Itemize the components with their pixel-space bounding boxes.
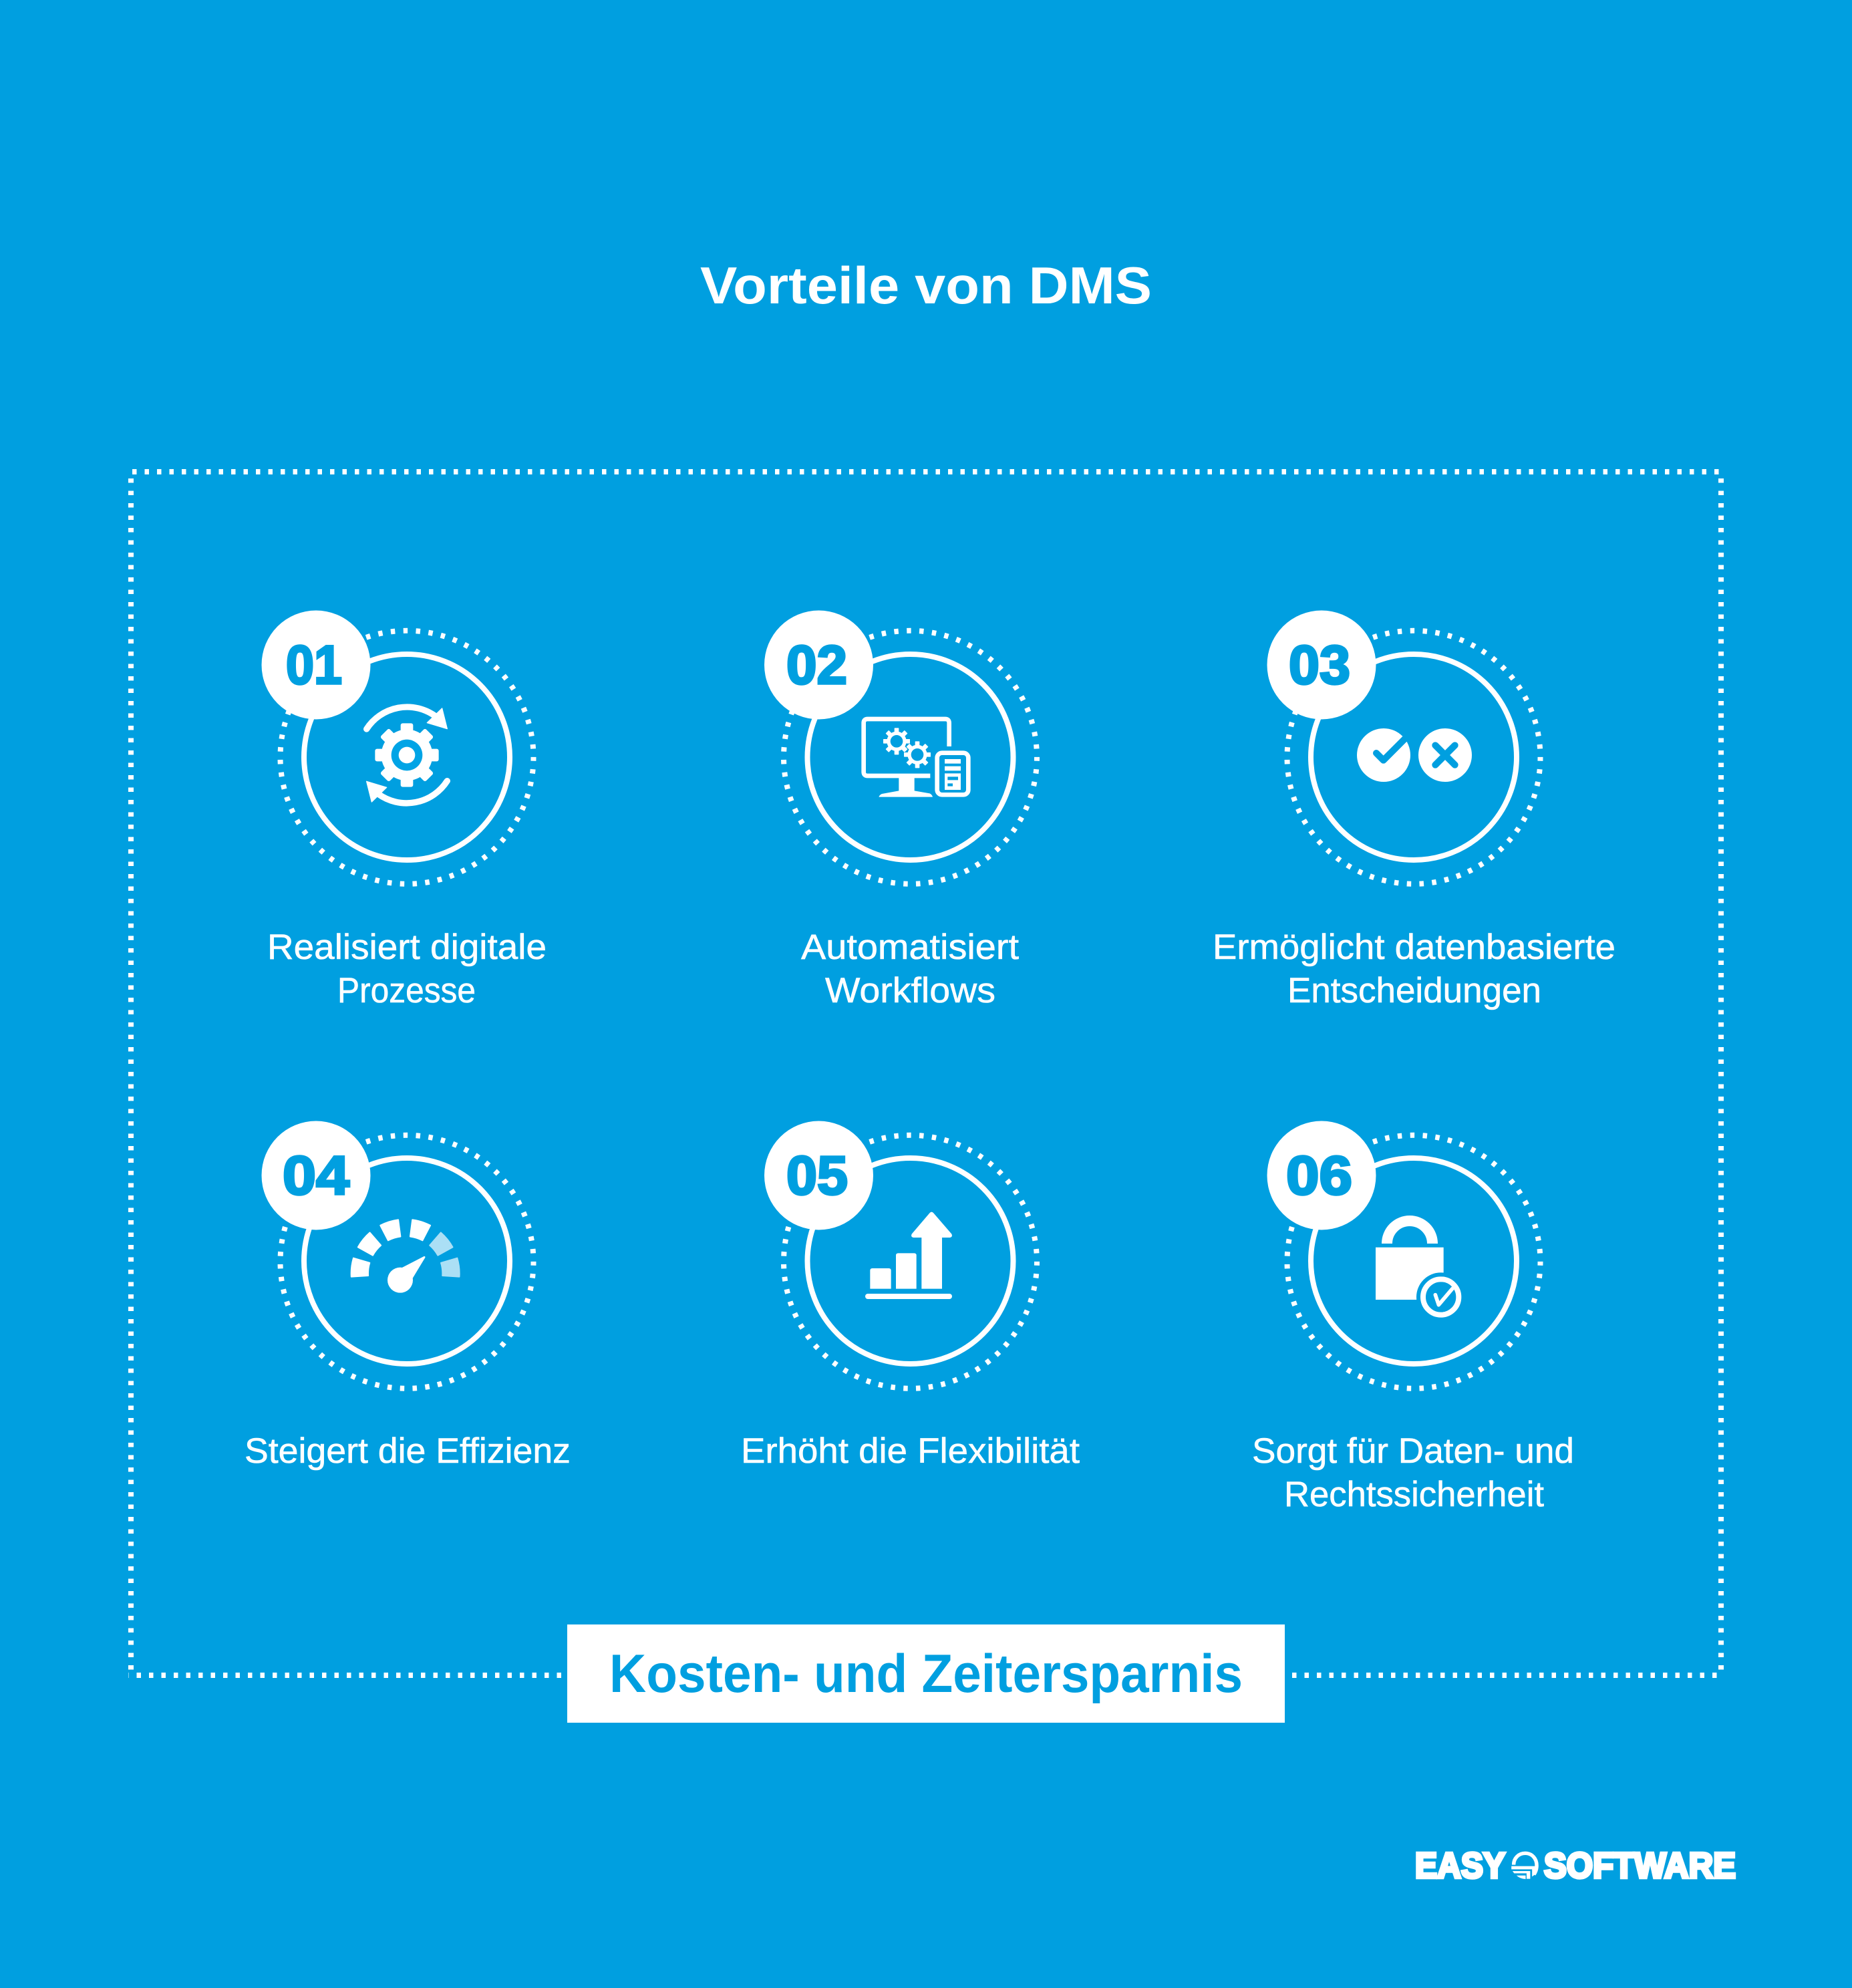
logo: EASY SOFTWARE: EASY [1415, 1846, 1505, 1886]
label 02 [801, 928, 1019, 1010]
label 03: Ermöglicht datenbasierte [1213, 928, 1615, 967]
badge 03 [1267, 611, 1376, 719]
label 06: Rechtssicherheit [1284, 1475, 1544, 1514]
panel: benefit 05 [741, 1121, 1080, 1471]
logo: EASY SOFTWARE: SOFTWARE [1544, 1846, 1736, 1886]
panel: benefit 02 [764, 611, 1037, 1010]
label 04: Steigert die Effizienz [245, 1431, 571, 1471]
badge 01: 01 [286, 635, 342, 696]
icon: speedometer [351, 1219, 460, 1293]
badge 06 [1267, 1121, 1376, 1230]
label 06: Sorgt für Daten- und [1252, 1431, 1574, 1471]
badge 01 [262, 611, 370, 719]
dotted frame [128, 472, 1724, 1675]
label 02: Workflows [825, 971, 995, 1010]
badge 04: 04 [283, 1145, 349, 1206]
panel: benefit 04 [245, 1121, 571, 1471]
badge 05 [764, 1121, 873, 1230]
badge 04 [262, 1121, 370, 1230]
icon: rising bar chart with arrow [865, 1212, 952, 1299]
label 05: Erhöht die Flexibilität [741, 1431, 1080, 1471]
icon: monitor with gears and document [864, 719, 968, 797]
label 01 [267, 928, 547, 1010]
logo: EASY SOFTWARE [1415, 1846, 1736, 1886]
icon: gear with cycle arrows [367, 707, 447, 803]
label 01: Realisiert digitale [267, 928, 547, 967]
title: Vorteile von DMS [700, 256, 1152, 315]
label 02: Automatisiert [801, 928, 1019, 967]
label 03: Entscheidungen [1287, 971, 1541, 1010]
badge 03: 03 [1289, 635, 1350, 696]
callout: cost and time savings [567, 1624, 1285, 1723]
callout: cost and time savings: Kosten- und Zeitersparnis [609, 1644, 1243, 1704]
panel: benefit 06 [1252, 1121, 1574, 1514]
badge 06: 06 [1286, 1145, 1352, 1206]
label 06 [1252, 1431, 1574, 1514]
badge 02: 02 [786, 635, 847, 696]
badge 02 [764, 611, 873, 719]
label 03 [1213, 928, 1615, 1010]
panel: benefit 03 [1213, 611, 1615, 1010]
panel: benefit 01 [262, 611, 547, 1010]
icon: check and cross [1357, 728, 1472, 782]
label 01: Prozesse [337, 971, 476, 1010]
icon: padlock with check [1376, 1221, 1465, 1322]
badge 05: 05 [786, 1145, 848, 1206]
